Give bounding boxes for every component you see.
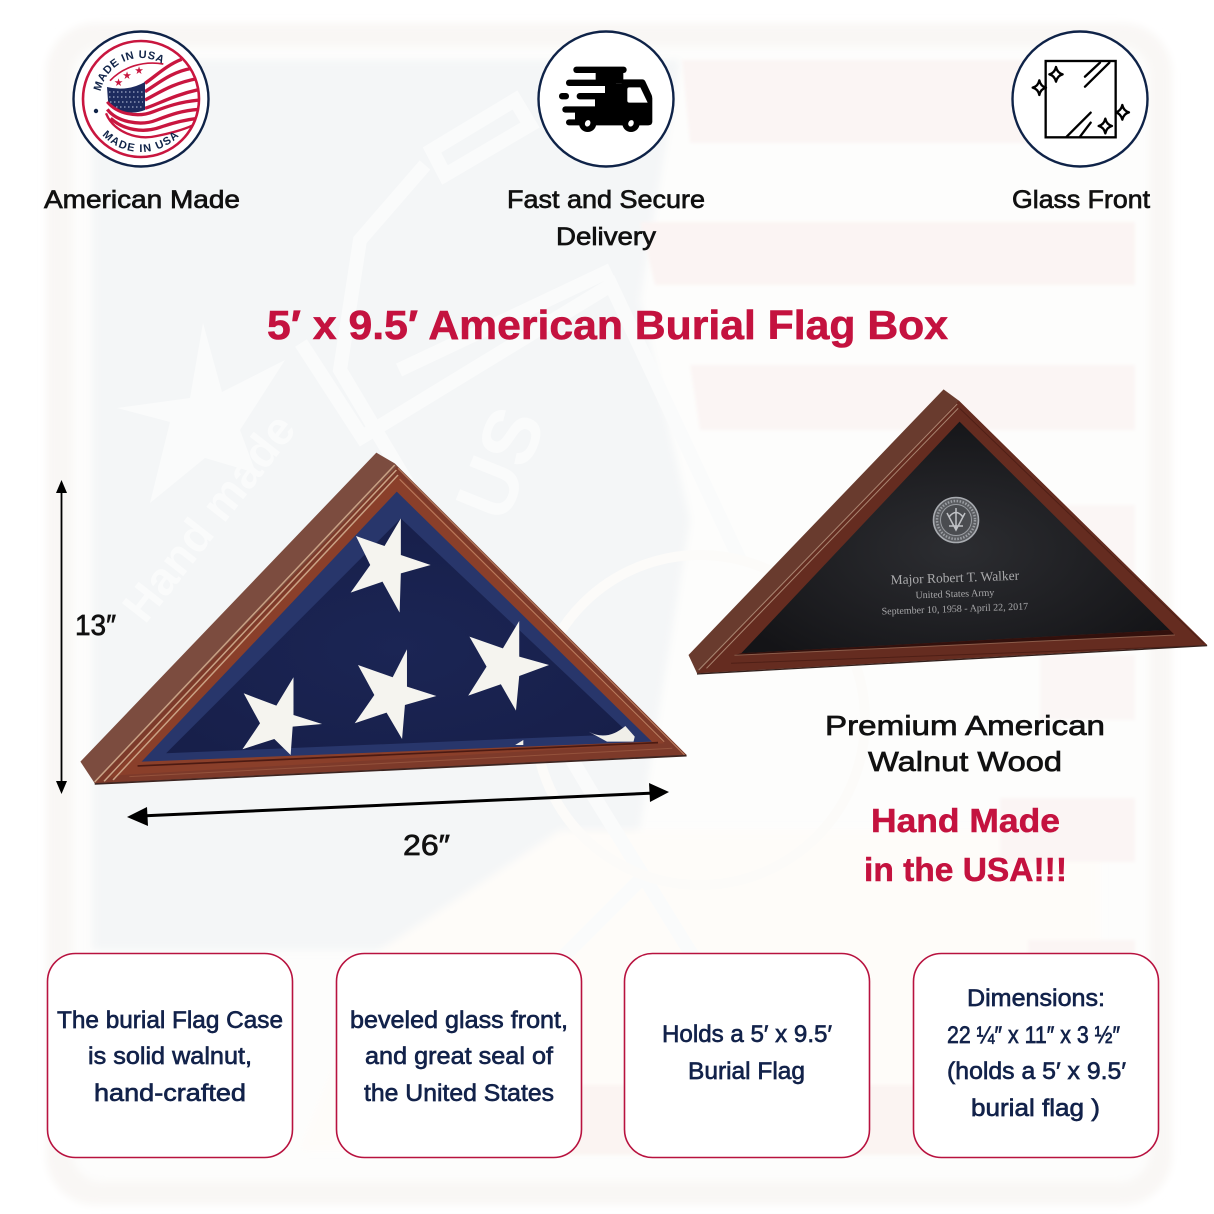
- card: beveled glass: [336, 954, 582, 1158]
- card: dimensions: burial flag ): [971, 1095, 1100, 1122]
- engraved inscription: Major Robert T. Walker: [890, 568, 1020, 587]
- card: beveled glass: the United States: [364, 1080, 554, 1107]
- arrow: height dimension: [56, 480, 67, 794]
- product photo: engraved flag case: [689, 389, 1207, 674]
- icon: made in USA badge: [72, 30, 210, 168]
- engraved inscription: [881, 568, 1028, 618]
- label: 26 inches: 26″: [403, 830, 450, 862]
- icon: glass pane: [1012, 32, 1148, 166]
- label: Fast and Secure Delivery: [507, 186, 705, 251]
- text: hand made in the USA: [864, 802, 1067, 888]
- icon: made in USA badge: MADE IN USA: [102, 130, 179, 152]
- card: dimensions: [914, 954, 1158, 1158]
- card: solid walnut: hand-crafted: [94, 1080, 246, 1107]
- card: dimensions: 22 ¼″ x 11″ x 3 ½″: [947, 1022, 1120, 1049]
- icon: made in USA badge: ★: [123, 70, 132, 80]
- icon: made in USA badge: ★: [135, 66, 144, 76]
- text: hand made in the USA: in the USA!!!: [864, 851, 1067, 888]
- engraved seal: [934, 498, 978, 542]
- card: holds flag: Burial Flag: [688, 1058, 805, 1085]
- card: solid walnut: The burial Flag Case: [57, 1007, 283, 1034]
- background watermark panel: US: [438, 395, 562, 531]
- card: solid walnut: is solid walnut,: [88, 1043, 252, 1070]
- label: Fast and Secure Delivery: Fast and Secure: [507, 186, 705, 214]
- arrow: width dimension: [127, 783, 669, 826]
- card: holds flag: [624, 954, 870, 1158]
- label: 13 inches: 13″: [75, 610, 116, 642]
- background watermark panel: Hand made: [112, 404, 306, 631]
- card: beveled glass: and great seal of: [365, 1043, 553, 1070]
- card: dimensions: Dimensions:: [967, 985, 1105, 1012]
- icon: made in USA badge: ★: [114, 78, 123, 88]
- icon: made in USA badge: MADE IN USA: [93, 50, 163, 91]
- title: 5′ x 9.5′ American Burial Flag Box: [267, 302, 948, 348]
- product photo: flag case with folded flag: [80, 453, 687, 784]
- card: solid walnut: [48, 954, 292, 1158]
- card: dimensions: (holds a 5′ x 9.5′: [947, 1058, 1127, 1085]
- label: Fast and Secure Delivery: Delivery: [556, 223, 657, 251]
- text: premium walnut wood: [825, 710, 1105, 777]
- text: premium walnut wood: Premium American: [825, 710, 1105, 741]
- card: beveled glass: beveled glass front,: [350, 1007, 568, 1034]
- engraved inscription: September 10, 1958 - April 22, 2017: [881, 601, 1028, 618]
- text: premium walnut wood: Walnut Wood: [868, 746, 1062, 777]
- engraved inscription: United States Army: [915, 588, 995, 601]
- text: hand made in the USA: Hand Made: [871, 802, 1060, 839]
- card: holds flag: Holds a 5′ x 9.5′: [662, 1021, 832, 1048]
- icon: delivery truck: [538, 32, 674, 166]
- label: Glass Front: Glass Front: [1012, 186, 1150, 214]
- label: American Made: American Made: [44, 186, 240, 214]
